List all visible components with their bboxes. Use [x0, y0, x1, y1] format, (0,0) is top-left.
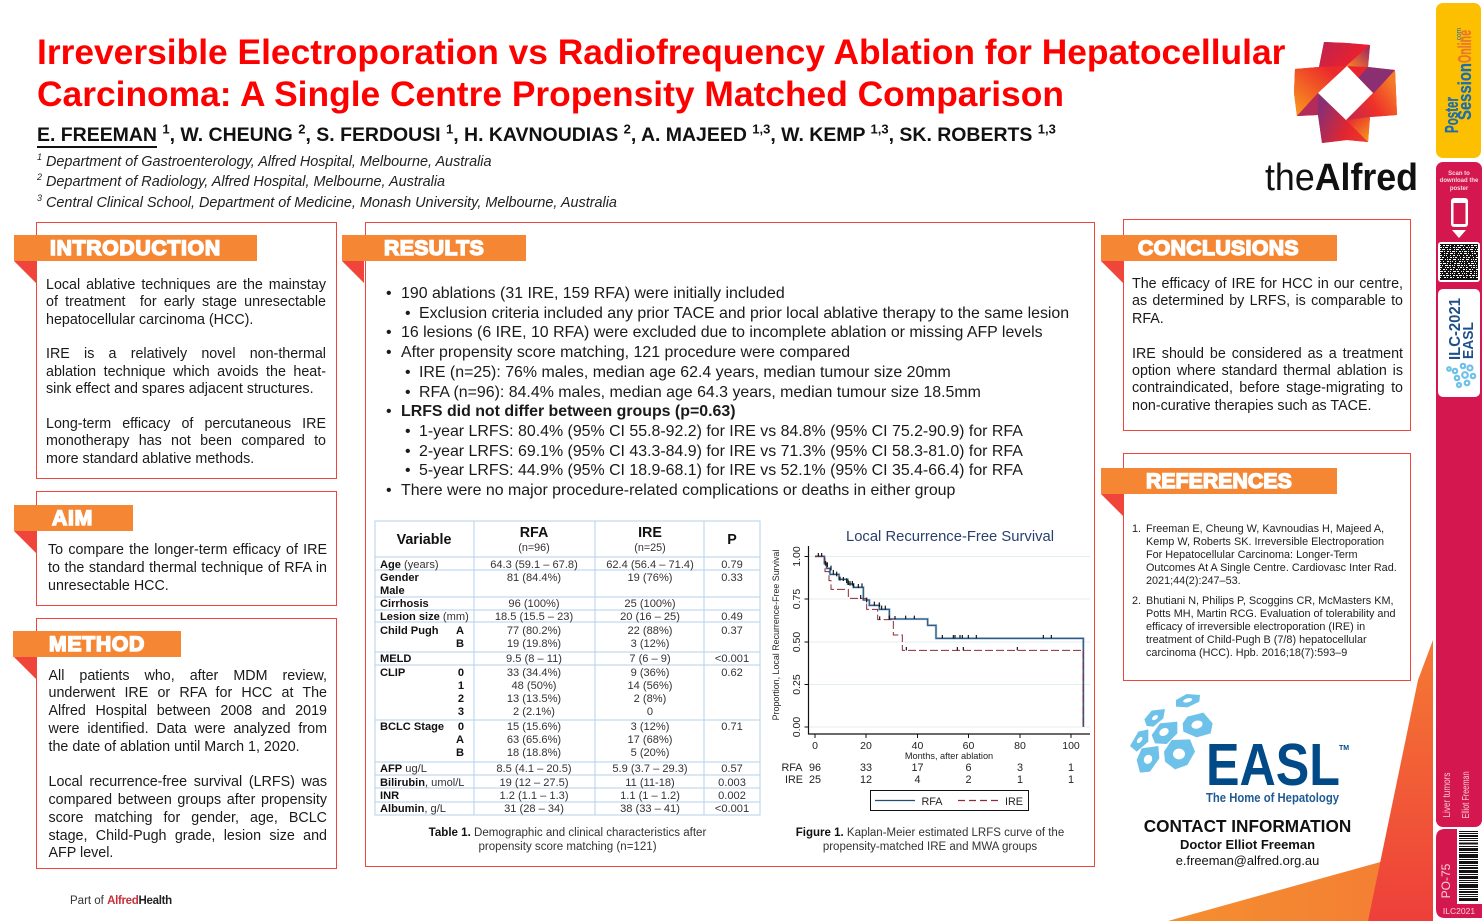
- table: demographic and clinical characteristics: 77 (80.2%): [507, 625, 561, 637]
- table: demographic and clinical characteristics: RFA: [520, 525, 548, 541]
- text: reference list: efficacy of irreversible electroporation (IRE) in: [1146, 621, 1365, 633]
- contact information: e.freeman@alfred.org.au: [1176, 852, 1319, 868]
- text: introduction body: sink effect and spares adjacent structures.: [46, 381, 314, 397]
- table: demographic and clinical characteristics: Variable: [397, 532, 451, 548]
- contact information: [1144, 816, 1351, 868]
- table: demographic and clinical characteristics: 13 (13.5%): [507, 693, 561, 705]
- text: method body: the date of ablation until March 1, 2020.: [48, 739, 300, 755]
- table: demographic and clinical characteristics: 96 (100%): [508, 598, 560, 610]
- table: demographic and clinical characteristics: 15 (15.6%): [507, 721, 561, 733]
- logo: EASL: The Home of Hepatology: [1206, 791, 1339, 805]
- sidebar: poster session online badge: [1436, 3, 1481, 158]
- chart: Kaplan-Meier local recurrence-free survival: 2: [965, 774, 972, 786]
- text: reference list: 1.: [1132, 523, 1141, 535]
- table: demographic and clinical characteristics: BCLC Stage: [380, 721, 444, 733]
- affiliations: [37, 152, 617, 210]
- table: demographic and clinical characteristics: (n=25): [634, 542, 666, 554]
- text: method body: AFP level.: [48, 845, 113, 861]
- text: results bullet list: IRE (n=25): 76% males, median age 62.4 years, median tumour size 20mm: [419, 364, 951, 381]
- table: demographic and clinical characteristics: 0.002: [718, 790, 746, 802]
- table: demographic and clinical characteristics: 5.9 (3.7 – 29.3): [612, 763, 688, 775]
- chart: Kaplan-Meier local recurrence-free survival: 60: [963, 740, 974, 752]
- icon: down arrow: [1452, 230, 1466, 238]
- sidebar: poster session online badge: Poster: [1442, 97, 1462, 133]
- chart: Kaplan-Meier local recurrence-free survival: 0.75: [791, 589, 803, 609]
- chart: Kaplan-Meier local recurrence-free survival: RFA: [922, 796, 943, 808]
- text: reference list: For Hepatocellular Carcinoma: Longer-Term: [1146, 549, 1358, 561]
- text: conclusions body: RFA.: [1132, 311, 1164, 327]
- table: demographic and clinical characteristics: 81 (84.4%): [507, 572, 561, 584]
- heading: introduction: INTRODUCTION: [50, 237, 221, 260]
- footer: part of Alfred Health: Part of AlfredHealth: [70, 895, 172, 907]
- chart: Kaplan-Meier local recurrence-free survival: 0: [812, 740, 818, 752]
- table: demographic and clinical characteristics: 11 (11-18): [625, 777, 675, 789]
- table: demographic and clinical characteristics: 5 (20%): [631, 747, 669, 759]
- table: demographic and clinical characteristics: MELD: [380, 653, 411, 665]
- text: introduction body: Long-term efficacy of percutaneous IRE: [46, 416, 326, 432]
- table: demographic and clinical characteristics: 18 (18.8%): [507, 747, 561, 759]
- icon: phone: [1451, 198, 1468, 227]
- text: aim body: unresectable HCC.: [48, 578, 169, 594]
- table: demographic and clinical characteristics: 3: [458, 706, 464, 718]
- table: demographic and clinical characteristics: 2: [458, 693, 464, 705]
- text: introduction body: Local ablative techniques are the mainstay: [46, 277, 326, 293]
- chart: Kaplan-Meier local recurrence-free survival: IRE: [1005, 796, 1023, 808]
- sidebar: crimson strip with QR and conference badge: poster: [1450, 186, 1469, 192]
- chart: Kaplan-Meier local recurrence-free survival: 33: [860, 762, 872, 774]
- chart: Kaplan-Meier local recurrence-free survival: 0.25: [791, 674, 803, 695]
- chart: Kaplan-Meier local recurrence-free survival: 20: [860, 740, 872, 752]
- text: results bullet list: 190 ablations (31 IRE, 159 RFA) were initially included: [401, 285, 785, 302]
- text: method body: Alfred Hospital between 2008 and 2019: [48, 703, 327, 719]
- table: demographic and clinical characteristics: CLIP: [380, 667, 406, 679]
- ILC-2021 EASL badge: [1438, 289, 1480, 397]
- chart: Kaplan-Meier local recurrence-free survival: Local Recurrence-Free Survival: [846, 529, 1054, 545]
- panel: conclusions: [1101, 219, 1411, 431]
- text: reference list: Freeman E, Cheung W, Kavnoudias H, Majeed A,: [1146, 523, 1384, 535]
- table: demographic and clinical characteristics: 20 (16 – 25): [620, 611, 680, 623]
- text: conclusions body: IRE should be considered as a treatment: [1132, 346, 1403, 362]
- panel: results: [342, 222, 1095, 867]
- panel: references: [1101, 453, 1411, 681]
- chart: Kaplan-Meier local recurrence-free survival: 80: [1014, 740, 1026, 752]
- text: method body: compared between groups after propensity: [48, 792, 327, 808]
- table: demographic and clinical characteristics: 0.49: [721, 611, 743, 623]
- ILC-2021 EASL badge: ILC-2021: [1447, 298, 1464, 360]
- QR code: [1438, 242, 1480, 282]
- table: demographic and clinical characteristics: 7 (6 – 9): [629, 653, 671, 665]
- logo: EASL: [1130, 694, 1349, 805]
- table: demographic and clinical characteristics: 0.79: [721, 559, 743, 571]
- table: demographic and clinical characteristics: INR: [380, 790, 399, 802]
- table: demographic and clinical characteristics: A: [456, 625, 464, 637]
- text: conclusions body: [1132, 276, 1403, 414]
- table: demographic and clinical characteristics: 1.1 (1 – 1.2): [620, 790, 680, 802]
- table caption: propensity score matching (n=121): [478, 841, 657, 853]
- title: [37, 33, 1285, 114]
- text: method body: underwent IRE or RFA for HCC at The: [48, 685, 327, 701]
- table: demographic and clinical characteristics: 9.5 (8 – 11): [506, 653, 562, 665]
- table: demographic and clinical characteristics: 0.33: [721, 572, 743, 584]
- text: method body: [48, 668, 327, 861]
- table: demographic and clinical characteristics: 1.2 (1.1 – 1.3): [499, 790, 569, 802]
- table: demographic and clinical characteristics: Age (years): [380, 559, 439, 571]
- table: demographic and clinical characteristics: Bilirubin, umol/L: [380, 777, 464, 789]
- text: reference list: Outcomes At A Single Centre. Cardiovasc Inter Rad.: [1146, 562, 1397, 574]
- figure caption: propensity-matched IRE and MWA groups: [823, 841, 1037, 853]
- table: demographic and clinical characteristics: 31 (28 – 34): [504, 803, 564, 815]
- sidebar labels: topic and author: Liver tumors: [1442, 772, 1453, 818]
- chart: Kaplan-Meier local recurrence-free survival: [771, 529, 1090, 811]
- sidebar: poster session online badge: Online: [1455, 30, 1475, 63]
- text: method body: score matching for gender, age, BCLC: [48, 810, 327, 826]
- table: demographic and clinical characteristics: 19 (19.8%): [507, 638, 561, 650]
- text: introduction body: monotherapy has not been compared to: [46, 433, 326, 449]
- table: demographic and clinical characteristics: 17 (68%): [627, 734, 673, 746]
- text: reference list: Kemp W, Roberts SK. Irreversible Electroporation: [1146, 536, 1384, 548]
- sidebar: poster number and barcode: ILC2021: [1443, 906, 1475, 916]
- table: demographic and clinical characteristics: 3 (12%): [631, 638, 669, 650]
- table: demographic and clinical characteristics: IRE: [638, 525, 662, 541]
- chart: Kaplan-Meier local recurrence-free survival: Proportion, Local Recurrence-Free Survival: [771, 550, 781, 720]
- text: introduction body: hepatocellular carcinoma (HCC).: [46, 312, 253, 328]
- sidebar: poster session online badge: Session: [1455, 63, 1475, 120]
- heading: results: [342, 235, 526, 261]
- table: demographic and clinical characteristics: 25 (100%): [624, 598, 676, 610]
- heading: conclusions: CONCLUSIONS: [1138, 237, 1299, 260]
- figure caption: Figure 1. Kaplan-Meier estimated LRFS curve of the: [796, 827, 1064, 839]
- text: reference list: treatment of Child-Pugh B (7/8) hepatocellular: [1146, 634, 1367, 646]
- contact information: CONTACT INFORMATION: [1144, 816, 1351, 836]
- affiliations: 1 Department of Gastroenterology, Alfred Hospital, Melbourne, Australia: [37, 152, 492, 170]
- chart: Kaplan-Meier local recurrence-free survival: RFA: [782, 762, 803, 774]
- chart: Kaplan-Meier local recurrence-free survival: 1: [1068, 762, 1074, 774]
- table: demographic and clinical characteristics: 14 (56%): [627, 680, 673, 692]
- table: demographic and clinical characteristics: 63 (65.6%): [507, 734, 561, 746]
- table: demographic and clinical characteristics: 38 (33 – 41): [620, 803, 680, 815]
- title: Irreversible Electroporation vs Radiofrequency Ablation for Hepatocellular: [37, 33, 1285, 72]
- text: method body: All patients who, after MDM review,: [48, 668, 327, 684]
- logo: the Alfred: [1265, 42, 1418, 199]
- sidebar: crimson strip with QR and conference badge: download the: [1440, 178, 1479, 184]
- sidebar: crimson strip with QR and conference badge: [1436, 162, 1482, 827]
- panel: method: [13, 618, 337, 869]
- table: demographic and clinical characteristics: Lesion size (mm): [380, 611, 469, 623]
- affiliations: 3 Central Clinical School, Department of Medicine, Monash University, Melbourne, Australia: [37, 193, 617, 210]
- sidebar: crimson strip with QR and conference badge: Scan to: [1448, 171, 1470, 177]
- table: demographic and clinical characteristics: Child Pugh: [380, 625, 439, 637]
- sidebar: poster session online badge: .com: [1456, 28, 1463, 42]
- chart: Kaplan-Meier local recurrence-free survival: 40: [912, 740, 923, 752]
- text: conclusions body: as determined by LRFS, is comparable to: [1132, 293, 1403, 309]
- text: results bullet list: There were no major procedure-related complications or deaths in either group: [401, 482, 955, 499]
- table: demographic and clinical characteristics: 3 (12%): [631, 721, 669, 733]
- table: demographic and clinical characteristics: Male: [380, 585, 405, 597]
- table: demographic and clinical characteristics: 64.3 (59.1 – 67.8): [490, 559, 578, 571]
- table: demographic and clinical characteristics: 33 (34.4%): [507, 667, 561, 679]
- table: demographic and clinical characteristics: <0.001: [715, 803, 749, 815]
- chart: Kaplan-Meier local recurrence-free survival: 25: [809, 774, 821, 786]
- table: demographic and clinical characteristics: 8.5 (4.1 – 20.5): [496, 763, 572, 775]
- table: demographic and clinical characteristics: <0.001: [715, 653, 749, 665]
- text: aim body: to the standard thermal technique of RFA in: [48, 560, 327, 576]
- sidebar labels: topic and author: Elliot Freeman: [1461, 772, 1472, 818]
- text: introduction body: [46, 277, 326, 467]
- text: results bullet list: 1-year LRFS: 80.4% (95% CI 55.8-92.2) for IRE vs 84.8% (95% CI 75.2-90.9) for RFA: [419, 423, 1023, 440]
- table: demographic and clinical characteristics: 62.4 (56.4 – 71.4): [606, 559, 694, 571]
- text: aim body: To compare the longer-term efficacy of IRE: [48, 542, 327, 558]
- table: demographic and clinical characteristics: 0: [647, 706, 653, 718]
- chart: Kaplan-Meier local recurrence-free survival: 6: [965, 762, 972, 774]
- table: demographic and clinical characteristics: B: [456, 747, 464, 759]
- text: results bullet list: Exclusion criteria included any prior TACE and prior local ablative therapy to the same lesion: [419, 305, 1069, 322]
- text: conclusions body: The efficacy of IRE for HCC in our centre,: [1132, 276, 1403, 292]
- authors: E. FREEMAN 1, W. CHEUNG 2, S. FERDOUSI 1, H. KAVNOUDIAS 2, A. MAJEED 1,3, W. KEMP 1,3, SK. ROBERTS 1,3: [37, 122, 1056, 146]
- text: conclusions body: non-curative therapies such as TACE.: [1132, 398, 1371, 414]
- chart: Kaplan-Meier local recurrence-free survival: 0.00: [791, 717, 803, 737]
- logo: EASL: TM: [1339, 745, 1349, 752]
- chart: Kaplan-Meier local recurrence-free survival: 96: [809, 762, 821, 774]
- text: introduction body: ablation technique which avoids the heat-: [46, 364, 326, 380]
- ILC-2021 EASL badge: EASL: [1461, 322, 1477, 359]
- table: demographic and clinical characteristics: 0.62: [721, 667, 743, 679]
- text: reference list: 2021;44(2):247–53.: [1146, 575, 1241, 587]
- chart: Kaplan-Meier local recurrence-free survival: Months, after ablation: [905, 751, 993, 761]
- chart: Kaplan-Meier local recurrence-free survival: 1: [1017, 774, 1023, 786]
- sidebar: poster number and barcode: [1436, 829, 1482, 918]
- chart: Kaplan-Meier local recurrence-free survival: 1.00: [791, 546, 803, 567]
- text: introduction body: more standard ablative methods.: [46, 451, 254, 467]
- heading: results: RESULTS: [384, 237, 484, 260]
- heading: references: [1101, 468, 1337, 494]
- table: demographic and clinical characteristics: 2 (8%): [634, 693, 666, 705]
- table caption: Table 1. Demographic and clinical characteristics after: [429, 827, 706, 839]
- heading: conclusions: [1101, 235, 1337, 261]
- table: demographic and clinical characteristics: (n=96): [518, 542, 550, 554]
- table: demographic and clinical characteristics: P: [727, 532, 737, 548]
- table: demographic and clinical characteristics: Cirrhosis: [380, 598, 429, 610]
- table caption: [428, 827, 706, 853]
- text: conclusions body: option where standard thermal ablation is: [1132, 363, 1403, 379]
- chart: Kaplan-Meier local recurrence-free survival: 100: [1062, 740, 1080, 752]
- text: results bullet list: 16 lesions (6 IRE, 10 RFA) were excluded due to incomplete ablation or missing AFP levels: [401, 324, 1043, 341]
- heading: method: METHOD: [49, 633, 145, 656]
- heading: aim: [14, 505, 133, 531]
- table: demographic and clinical characteristics: 19 (76%): [627, 572, 673, 584]
- heading: aim: AIM: [52, 507, 93, 530]
- table: demographic and clinical characteristics: Albumin, g/L: [380, 803, 446, 815]
- contact information: Doctor Elliot Freeman: [1180, 837, 1315, 852]
- text: reference list: [1132, 523, 1397, 659]
- affiliations: 2 Department of Radiology, Alfred Hospital, Melbourne, Australia: [37, 172, 445, 190]
- table: demographic and clinical characteristics: AFP ug/L: [380, 763, 427, 775]
- text: conclusions body: contraindicated, before stage-migrating to: [1132, 380, 1403, 396]
- chart: Kaplan-Meier local recurrence-free survival: 17: [911, 762, 924, 774]
- table: demographic and clinical characteristics: 0: [458, 721, 464, 733]
- text: reference list: Bhutiani N, Philips P, Scoggins CR, McMasters KM,: [1146, 595, 1394, 607]
- chart: Kaplan-Meier local recurrence-free survival: 12: [860, 774, 872, 786]
- heading: references: REFERENCES: [1146, 470, 1292, 493]
- text: results bullet list: After propensity score matching, 121 procedure were compared: [401, 344, 850, 361]
- panel: aim: [14, 491, 337, 606]
- text: method body: Local recurrence-free survival (LRFS) was: [48, 774, 327, 790]
- text: introduction body: IRE is a relatively novel non-thermal: [46, 346, 326, 362]
- text: method body: stage, Child-Pugh grade, lesion size and: [48, 828, 327, 844]
- panel: introduction: [14, 222, 337, 479]
- table: demographic and clinical characteristics: 19 (12 – 27.5): [499, 777, 569, 789]
- table: demographic and clinical characteristics: 0.37: [721, 625, 743, 637]
- text: reference list: 2.: [1132, 595, 1141, 607]
- table: demographic and clinical characteristics: 0: [458, 667, 464, 679]
- text: introduction body: of treatment for early stage unresectable: [46, 294, 326, 310]
- table: demographic and clinical characteristics: 18.5 (15.5 – 23): [495, 611, 573, 623]
- table: demographic and clinical characteristics: 48 (50%): [511, 680, 557, 692]
- text: results bullet list: 2-year LRFS: 69.1% (95% CI 43.3-84.9) for IRE vs 71.3% (95% CI 58.3-81.0) for RFA: [419, 443, 1023, 460]
- chart: Kaplan-Meier local recurrence-free survival: 1: [1068, 774, 1074, 786]
- text: method body: were identified. Data were analyzed from: [48, 721, 327, 737]
- table: demographic and clinical characteristics: 9 (36%): [631, 667, 669, 679]
- chart: Kaplan-Meier local recurrence-free survival: 3: [1017, 762, 1023, 774]
- table: demographic and clinical characteristics: [374, 520, 760, 816]
- text: aim body: [48, 542, 327, 594]
- table: demographic and clinical characteristics: 0.71: [721, 721, 743, 733]
- sidebar: poster number and barcode: PO-75: [1439, 863, 1453, 898]
- table: demographic and clinical characteristics: 2 (2.1%): [513, 706, 555, 718]
- text: results bullet list: RFA (n=96): 84.4% males, median age 64.3 years, median tumour size 18.5mm: [419, 384, 981, 401]
- text: results bullet list: [386, 285, 1069, 499]
- figure caption: [796, 827, 1064, 853]
- logo: the Alfred: theAlfred: [1265, 157, 1418, 199]
- chart: Kaplan-Meier local recurrence-free survival: 4: [914, 774, 921, 786]
- text: reference list: carcinoma (HCC). Hpb. 2016;18(7):593–9: [1146, 647, 1347, 659]
- table: demographic and clinical characteristics: 0.003: [718, 777, 746, 789]
- chart: Kaplan-Meier local recurrence-free survival: 0.50: [791, 632, 803, 652]
- table: demographic and clinical characteristics: 22 (88%): [627, 625, 673, 637]
- table: demographic and clinical characteristics: B: [456, 638, 464, 650]
- table: demographic and clinical characteristics: 0.57: [721, 763, 743, 775]
- text: results bullet list: 5-year LRFS: 44.9% (95% CI 18.9-68.1) for IRE vs 52.1% (95% CI 35.4-66.4) for RFA: [419, 462, 1023, 479]
- heading: introduction: [14, 235, 257, 261]
- chart: Kaplan-Meier local recurrence-free survival: IRE: [785, 774, 803, 786]
- title: Carcinoma: A Single Centre Propensity Matched Comparison: [37, 75, 1064, 114]
- table: demographic and clinical characteristics: 1: [458, 680, 464, 692]
- text: results bullet list: LRFS did not differ between groups (p=0.63): [401, 403, 736, 420]
- sidebar labels: topic and author: [1442, 772, 1472, 818]
- table: demographic and clinical characteristics: Gender: [380, 572, 420, 584]
- text: reference list: Potts MH, Martin RCG. Evaluation of tolerability and: [1146, 608, 1396, 620]
- heading: method: [13, 631, 181, 657]
- table: demographic and clinical characteristics: A: [456, 734, 464, 746]
